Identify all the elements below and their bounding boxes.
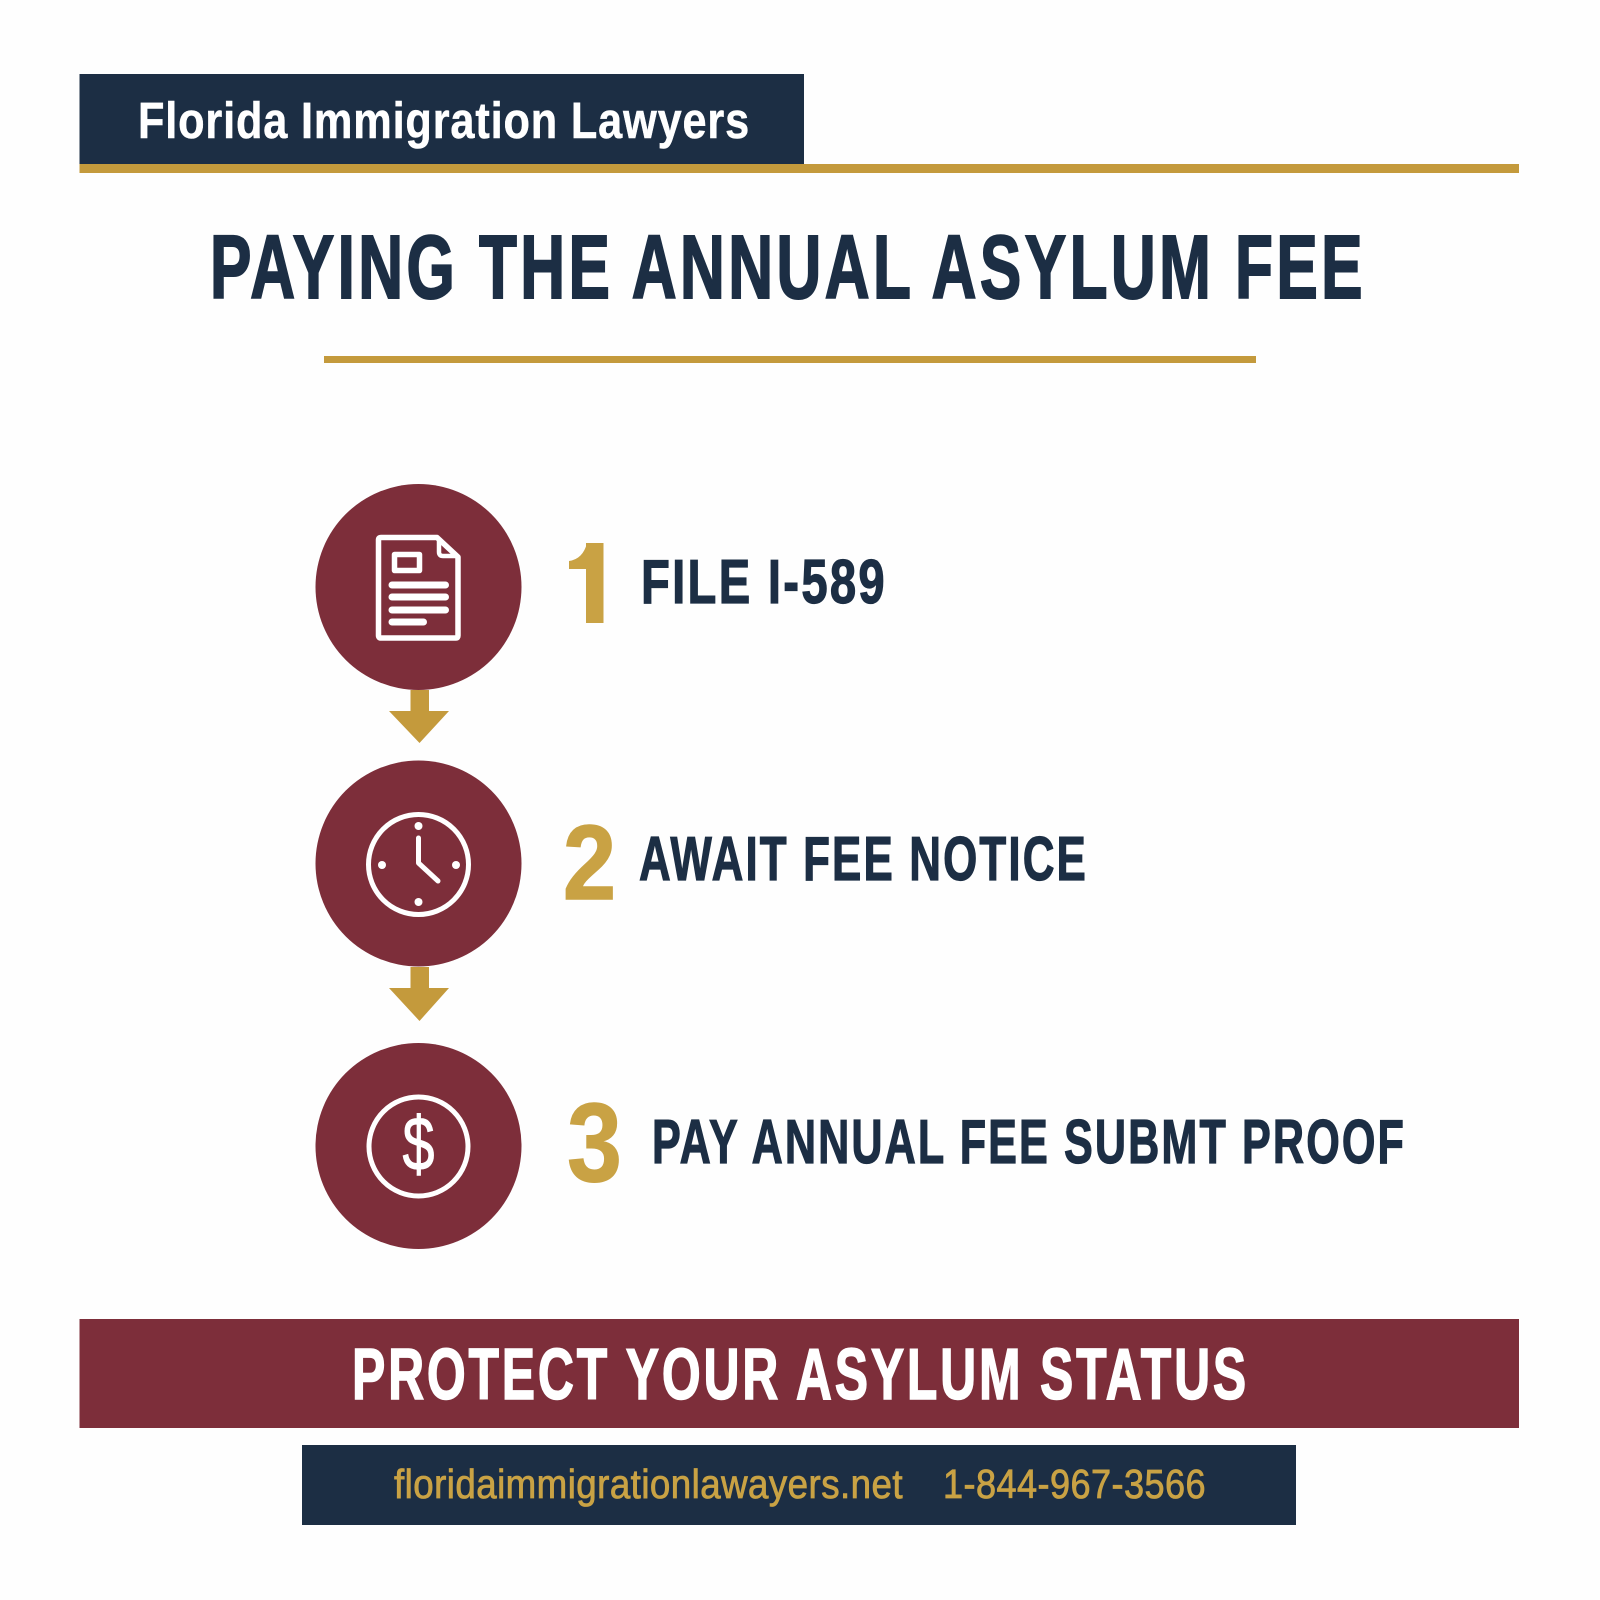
step 1 [316, 484, 887, 690]
icon: document [378, 538, 458, 638]
step 3 circle [316, 1043, 522, 1249]
step 2 [316, 760, 1088, 966]
step 2 number: 2 [563, 804, 616, 922]
step 2 label: AWAIT FEE NOTICE [639, 825, 1088, 894]
step 3 number: 3 [567, 1080, 622, 1205]
phone: 1-844-967-3566 [943, 1461, 1206, 1507]
step 1 number: 1 [559, 518, 624, 648]
arrow 2 [389, 967, 449, 1021]
icon: clock [368, 814, 468, 914]
step 3 [316, 1043, 1406, 1249]
arrow 1 [389, 690, 449, 743]
header gold rule [80, 164, 1519, 173]
contact bar [302, 1445, 1296, 1525]
step 2 circle [316, 760, 522, 966]
step 1 circle [316, 484, 522, 690]
step 1 label: FILE I-589 [641, 548, 887, 617]
banner [80, 1319, 1519, 1428]
header text: Florida Immigration Lawyers [138, 92, 750, 149]
website: floridaimmigrationlawayers.net [394, 1461, 903, 1507]
title divider [324, 356, 1256, 363]
step 1 number [569, 543, 604, 623]
header tab [80, 74, 804, 164]
icon: dollar coin: $ [402, 1102, 434, 1187]
icon: dollar coin [369, 1097, 468, 1196]
